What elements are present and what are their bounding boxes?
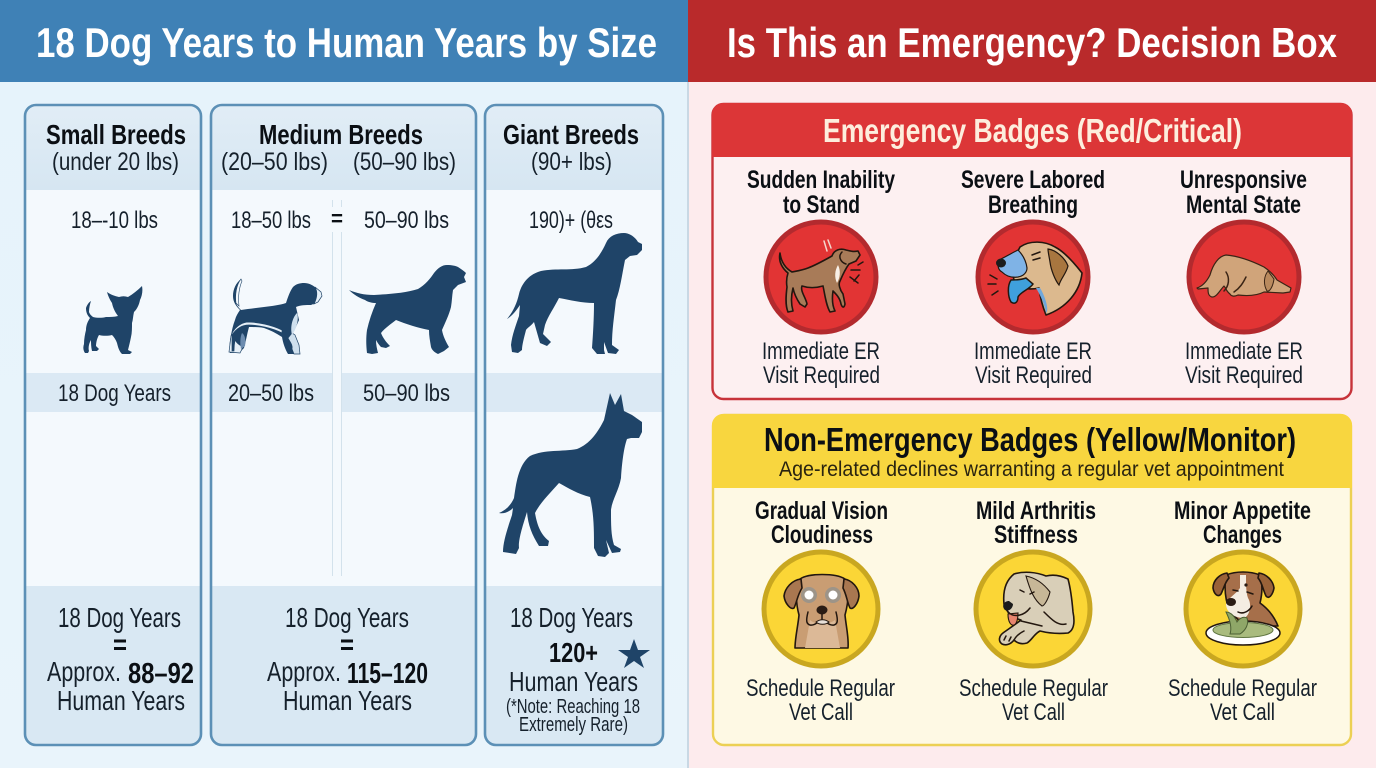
result: small breeds: 88–92 [128,658,194,690]
result: small breeds: = [113,629,127,660]
left header band [0,0,688,82]
badge: mild arthritis stiffness: Vet Call [1002,699,1065,726]
badge: mild arthritis stiffness: Schedule Regular [959,675,1108,702]
badge: severe labored breathing: Severe Labored [961,166,1105,194]
result: medium breeds: Approx. [267,656,341,687]
badge: gradual vision cloudiness: Cloudiness [771,521,873,549]
badge: severe labored breathing [961,166,1105,389]
panel: medium breeds [211,105,476,745]
right header band [688,0,1376,82]
heading: small breeds: Small Breeds [46,119,186,150]
badge: minor appetite changes [1168,497,1317,726]
icon: collapsed dog [1197,255,1291,297]
icon: great dane silhouette [499,393,642,557]
badge: mild arthritis stiffness: Mild Arthritis [976,497,1096,525]
panel: small breeds [25,105,201,745]
result: giant breeds: Extremely Rare) [519,714,628,736]
panel: right background [688,0,1376,768]
panel: non-emergency badges [712,414,1352,745]
icon: panting dog with blue tongue [988,242,1082,315]
result: small breeds: Approx. [47,656,121,687]
badge: sudden inability to stand: Immediate ER [762,338,880,365]
badge: unresponsive mental state [1180,166,1307,389]
heading: giant breeds: Giant Breeds [503,119,639,150]
equals sign: = [331,206,343,231]
badge: gradual vision cloudiness: Vet Call [789,699,853,726]
heading: medium breeds: Medium Breeds [259,119,423,150]
result: medium breeds: = [340,629,354,660]
label: small weight row: 18–-10 lbs [71,207,158,234]
icon: dog eating from plate [1206,572,1280,645]
badge: minor appetite changes: Changes [1203,521,1282,549]
badge: minor appetite changes: Schedule Regular [1168,675,1317,702]
result: small breeds [47,602,194,716]
icon: beagle silhouette [229,279,322,354]
result: medium breeds: Human Years [283,685,412,716]
icon: stiff dog lying down [999,572,1074,645]
badge: unresponsive mental state: Immediate ER [1185,338,1303,365]
badge: unresponsive mental state: Mental State [1186,191,1301,219]
result: small breeds: 18 Dog Years [58,602,181,633]
badge: gradual vision cloudiness: Schedule Regular [746,675,895,702]
icon: dog with cloudy eyes [784,574,859,648]
weight range: giant: (90+ lbs) [531,148,612,176]
badge: sudden inability to stand: Sudden Inability [747,166,895,194]
icon: wobbling dog [780,240,863,312]
badge: sudden inability to stand: Visit Required [763,362,880,389]
result: small breeds: Human Years [57,685,185,716]
heading: emergency badges: Emergency Badges (Red/Critical) [823,112,1242,149]
result: giant breeds: 18 Dog Years [510,602,633,633]
badge: gradual vision cloudiness: Gradual Vision [755,497,888,525]
panel: giant breeds [485,105,663,745]
badge: unresponsive mental state: Visit Required [1185,362,1303,389]
badge: mild arthritis stiffness [959,497,1108,726]
result: medium breeds: 18 Dog Years [285,602,409,633]
icon: chihuahua silhouette [83,286,142,354]
label: small dog years row: 18 Dog Years [58,380,171,407]
weight range: small: (under 20 lbs) [52,148,179,176]
badge: severe labored breathing: Visit Required [975,362,1092,389]
badge: minor appetite changes: Minor Appetite [1174,497,1311,525]
badge: severe labored breathing: Immediate ER [974,338,1092,365]
badge: sudden inability to stand: to Stand [783,191,860,219]
label: medium high dog row: 50–90 lbs [363,380,450,407]
label: medium low row: 18–50 lbs [231,207,311,234]
badge: minor appetite changes: Vet Call [1210,699,1275,726]
panel: emergency badges [712,103,1352,399]
icon: large dog silhouette [507,233,642,354]
result: medium breeds: 115–120 [347,658,428,690]
badge: gradual vision cloudiness [746,497,895,726]
weight range: medium low: (20–50 lbs) [221,148,328,176]
weight range: medium high: (50–90 lbs) [353,148,456,176]
badge: sudden inability to stand [747,166,895,389]
icon: labrador silhouette [349,265,466,354]
icon: star [618,639,650,668]
result: giant breeds: Human Years [509,666,638,697]
result: medium breeds [267,602,428,716]
label: medium low dog row: 20–50 lbs [228,380,314,407]
result: giant breeds: 120+ [549,637,598,668]
title: dog years: 18 Dog Years to Human Years by Size [36,19,657,66]
result: giant breeds: (*Note: Reaching 18 [506,696,640,718]
result: giant breeds [506,602,650,736]
label: giant weight row: 190)+ (θεs [529,207,613,234]
panel: left background [0,0,688,768]
badge: unresponsive mental state: Unresponsive [1180,166,1307,194]
badge: mild arthritis stiffness: Stiffness [994,521,1078,549]
badge: severe labored breathing: Breathing [988,191,1078,219]
subheading: Age-related declines warranting a regular vet appointment [779,458,1284,481]
label: medium high row: 50–90 lbs [364,207,449,234]
